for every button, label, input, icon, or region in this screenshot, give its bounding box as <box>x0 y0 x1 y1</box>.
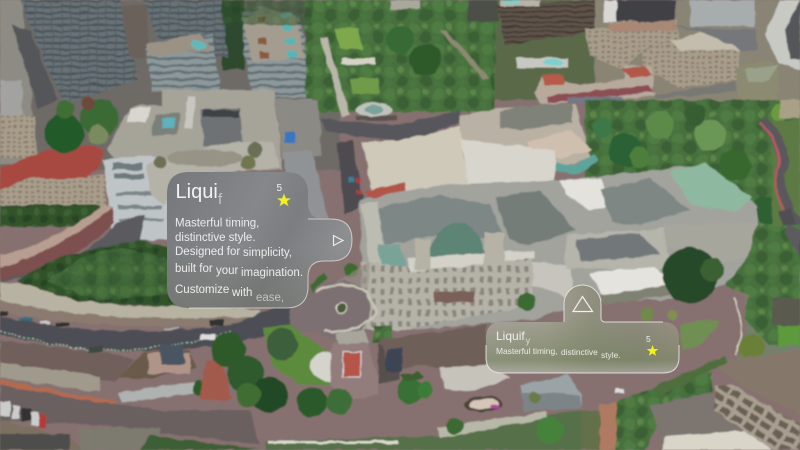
north skyline buildings <box>468 0 800 105</box>
glass panel: lower card <box>486 285 679 373</box>
panel title: Liqui <box>176 181 218 203</box>
lower annex and flower bed <box>465 375 623 412</box>
north plaza road <box>320 110 470 215</box>
park trees north centre <box>222 0 519 121</box>
garden behind casino <box>518 225 800 311</box>
red roof building and trees west <box>0 96 145 282</box>
east gardens and road <box>585 100 800 265</box>
panel body text: simplicity, <box>243 247 292 259</box>
icon: triangle arrow <box>573 296 592 312</box>
panel body text: distinctive style. <box>175 232 256 244</box>
south casino forecourt <box>380 325 510 404</box>
lower star rating <box>646 334 658 356</box>
panel body text <box>175 218 303 304</box>
panel title: f <box>218 191 223 208</box>
panel body text: Masterful timing, <box>175 218 259 230</box>
south terrace <box>0 340 260 450</box>
panel body text: imagination. <box>241 267 303 279</box>
lower body text: style. <box>601 350 621 360</box>
panel body text: Customize <box>175 284 229 296</box>
lower title: y <box>526 336 530 346</box>
east terrace and stepped building <box>650 285 800 450</box>
lower title <box>496 329 530 346</box>
right forecourt palms <box>640 308 720 350</box>
panel body text: your <box>216 265 239 277</box>
main road and roundabout <box>0 262 393 352</box>
panel body text: with <box>231 287 252 299</box>
hotel building <box>103 90 328 240</box>
panel body text: Designed for <box>175 246 240 258</box>
star rating: 5 <box>276 183 282 194</box>
southern hedges <box>265 372 712 450</box>
lower star rating: 5 <box>646 334 651 344</box>
west hill and promenade <box>0 240 265 335</box>
star rating <box>276 183 290 206</box>
central gardens and red stairs <box>211 325 400 417</box>
panel body text: built for <box>175 263 213 275</box>
north-west towers and streets <box>0 0 340 170</box>
lower body text: distinctive <box>561 347 598 357</box>
glass panel: main card <box>167 172 352 308</box>
lower body text <box>496 346 621 360</box>
panel body text: ease, <box>256 292 284 304</box>
lower body text: Masterful timing, <box>496 346 557 356</box>
casino complex <box>360 104 757 330</box>
lower title: Liquif <box>496 329 525 343</box>
icon: play arrow <box>334 236 343 246</box>
